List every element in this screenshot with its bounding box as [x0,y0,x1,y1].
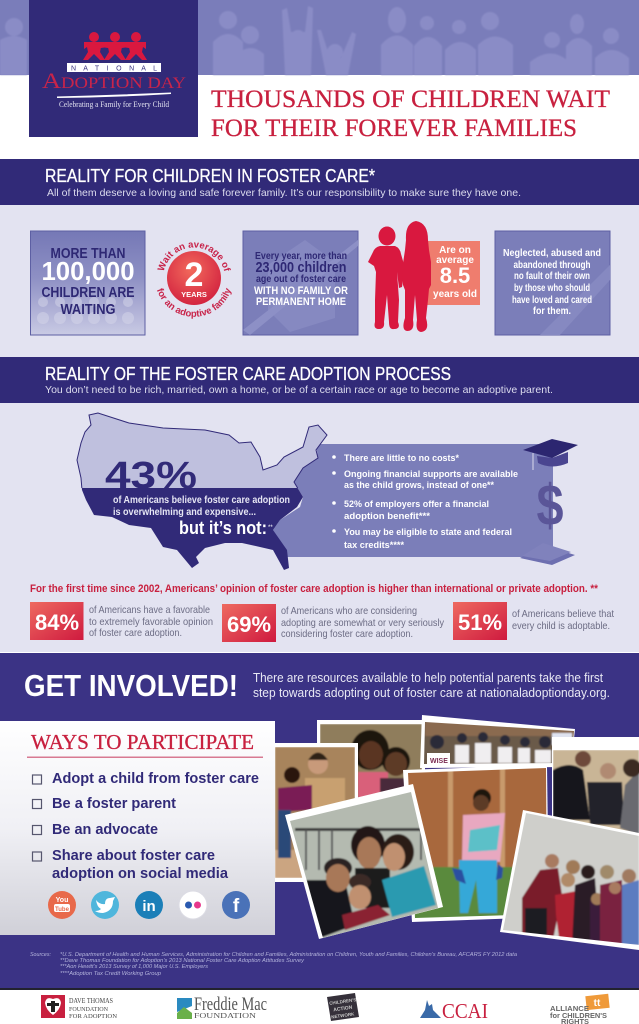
stat: 69% [222,604,445,642]
panel: cost facts: tax credits**** [344,540,404,551]
map: United States with 43% statistic: ** [268,525,273,531]
icon: youtube: Tube [55,907,70,913]
section band: adoption process: You don’t need to be rich, married, own a home, or be of a certain race or age to become an adoptive parent. [45,384,553,396]
heading: ways to participate: WAYS TO PARTICIPATE [31,730,254,754]
stat: 69%: considering foster care adoption. [281,628,413,640]
section band: reality for children: REALITY FOR CHILDREN IN FOSTER CARE* [45,166,375,186]
panel: neglected and abused: abandoned through [514,259,590,271]
logo: Children's Action Network: CHILDREN'S [329,997,357,1006]
panel: cost facts: 52% of employers offer a financial [344,499,489,510]
panel: more than 100,000: 100,000 [42,256,134,286]
stat: 51%: of Americans believe that [512,608,614,620]
panel: age out of foster care: WITH NO FAMILY OR [254,285,348,297]
panel: neglected and abused: for them. [533,305,571,317]
stat: 51%: 51% [458,610,502,635]
logo: Alliance for Children's Rights: for CHILDREN'S [550,1013,607,1020]
logo: Dave Thomas Foundation: FOR ADOPTION [69,1013,117,1020]
logo: National Adoption Day: N A T I O N A L [71,66,157,72]
logo: Children's Action Network [327,993,359,1021]
callout: average age: years old [433,289,477,300]
photo: family of four [285,784,445,940]
icon: facebook: f [233,896,240,917]
header band with children silhouettes [0,0,639,75]
section band: reality for children [0,159,639,205]
logo: Freddie Mac Foundation: Freddie Mac [194,994,267,1015]
sources: *U.S. Department of Health and Human Services, Administration for Children and Families, Administration on Children, Youth and Families, Children’s Bureau, AFCARS FY 2012 data [60,952,517,958]
stat: 84% [30,602,213,640]
badge: wait 2 years: 2 [185,256,203,294]
map: United States with 43% statistic: 43% [105,455,197,497]
checklist: Adopt a child from foster care [52,771,259,787]
heading: get involved: GET INVOLVED! [24,668,238,703]
checklist: adoption on social media [52,866,229,882]
panel: cost facts: adoption benefit*** [344,511,430,522]
icon: twitter [91,891,119,919]
panel: more than 100,000 [30,231,145,335]
stat: 84%: of foster care adoption. [89,627,182,639]
sources: **Dave Thomas Foundation for Adoption’s 2013 National Foster Care Adoption Attitudes Survey [60,958,305,964]
logo: Dave Thomas Foundation: DAVE THOMAS [69,997,113,1005]
panel: more than 100,000: CHILDREN ARE [42,284,134,301]
photo: large family [500,810,639,950]
checklist: Share about foster care [52,848,215,864]
panel: cost facts [273,444,553,557]
panel: age out of foster care: age out of foster care [256,273,346,285]
logo: National Adoption Day: ADOPTION DAY [42,68,186,93]
logo: CCAI [420,999,488,1023]
callout: average age: Are on [439,245,471,256]
checklist: Be a foster parent [52,796,176,812]
photo: courtroom group [420,715,576,768]
section band: reality for children: All of them deserve a loving and safe forever family. It’s our responsibility to make sure they have one. [47,187,521,199]
logo: Children's Action Network: NETWORK [331,1011,355,1020]
panel: cost facts: as the child grows, instead of one** [344,480,494,491]
checklist [32,771,259,882]
panel background: foster care facts [0,205,639,652]
text: resources: step towards adopting out of foster care at nationaladoptionday.org. [253,686,610,700]
callout: average age: average [436,255,474,266]
footer: sponsor logos [0,988,639,1024]
title [211,84,610,142]
stat: 51%: every child is adoptable. [512,620,610,632]
badge: wait 2 years: for an adoptive family [157,288,232,319]
icon: linkedin: in [142,898,156,915]
sources: Sources: [30,952,51,958]
checklist: Be an advocate [52,822,158,838]
stat: 69%: of Americans who are considering [281,605,417,617]
logo: Freddie Mac Foundation [177,994,267,1020]
panel: neglected and abused: Neglected, abused and [503,247,601,259]
icon: two children silhouettes [368,221,431,332]
map: United States with 43% statistic: is overwhelming and expensive... [113,507,256,518]
panel: neglected and abused: no fault of their own [514,270,590,282]
callout: average age: 8.5 [440,263,470,288]
panel: cost facts: Ongoing financial supports are available [344,469,518,480]
panel: cost facts: There are little to no costs* [344,453,459,464]
icon: linkedin [135,891,163,919]
badge: wait 2 years [157,242,232,319]
stat: 84%: of Americans have a favorable [89,604,210,616]
stat: 51% [453,602,614,640]
photo: mother and son [317,720,425,798]
icon: youtube [48,891,76,919]
panel: more than 100,000: WAITING [60,301,116,318]
logo: Dave Thomas Foundation: FOUNDATION [69,1007,109,1013]
title: THOUSANDS OF CHILDREN WAIT [211,84,610,113]
photo: father and daughter [275,743,358,882]
icon: stacked papers [520,543,575,565]
callout: average age [427,241,480,305]
panel: age out of foster care: Every year, more than [255,250,347,262]
icon: paper dolls [83,32,147,60]
map: United States with 43% statistic [77,413,327,570]
logo: Alliance for Children's Rights: ALLIANCE [550,1006,589,1013]
text: resources: There are resources available to help potential parents take the first [253,671,603,685]
icon: facebook [222,891,250,919]
section band: adoption process: REALITY OF THE FOSTER CARE ADOPTION PROCESS [45,364,451,384]
panel: cost facts: You may be eligible to state and federal [344,527,512,538]
photo: courtroom group: WISE [430,758,448,765]
icon: youtube: You [56,897,68,904]
stat: 84%: 84% [35,610,79,635]
map: United States with 43% statistic: of Americans believe foster care adoption [113,495,290,506]
logo: Dave Thomas Foundation [41,995,117,1020]
section band: adoption process [0,357,639,403]
panel: age out of foster care: 23,000 children [256,259,346,276]
sources: ****Adoption Tax Credit Working Group [60,971,161,977]
text: resources [253,671,610,700]
title: FOR THEIR FOREVER FAMILIES [211,113,577,142]
panel: neglected and abused: have loved and cared [512,294,592,306]
photo: girl on swing [400,765,550,922]
icon: dollar sign: $ [536,473,564,538]
sources: ***Aon Hewitt’s 2013 Survey of 1,000 Major U.S. Employers [60,964,208,970]
panel: more than 100,000: MORE THAN [50,245,126,262]
panel background: get involved [0,653,639,988]
sources [30,952,517,977]
icon: flickr [179,891,207,919]
photo: judge and family [552,737,639,842]
panel: ways to participate [0,721,275,935]
map: United States with 43% statistic: but it’s not: [179,518,267,538]
logo: CCAI: CCAI [442,999,488,1023]
logo: Children's Action Network: ACTION [333,1005,353,1013]
stat: 69%: 69% [227,612,271,637]
logo: Alliance for Children's Rights [550,994,610,1024]
panel: neglected and abused [495,231,610,335]
panel: age out of foster care [243,231,358,335]
stat: 84%: to extremely favorable opinion [89,616,213,628]
badge: wait 2 years: Wait an average of [157,242,231,271]
icon: graduation cap [523,439,578,470]
panel: age out of foster care: PERMANENT HOME [256,296,346,308]
badge: wait 2 years: YEARS [181,290,207,299]
panel: neglected and abused: by those who should [514,282,590,294]
stat: 69%: adopting are somewhat or very seriously [281,617,445,629]
logo: Freddie Mac Foundation: FOUNDATION [194,1012,256,1020]
logo: National Adoption Day [29,0,198,137]
logo: Alliance for Children's Rights: tt [594,998,601,1009]
logo: National Adoption Day: Celebrating a Family for Every Child [59,99,170,109]
